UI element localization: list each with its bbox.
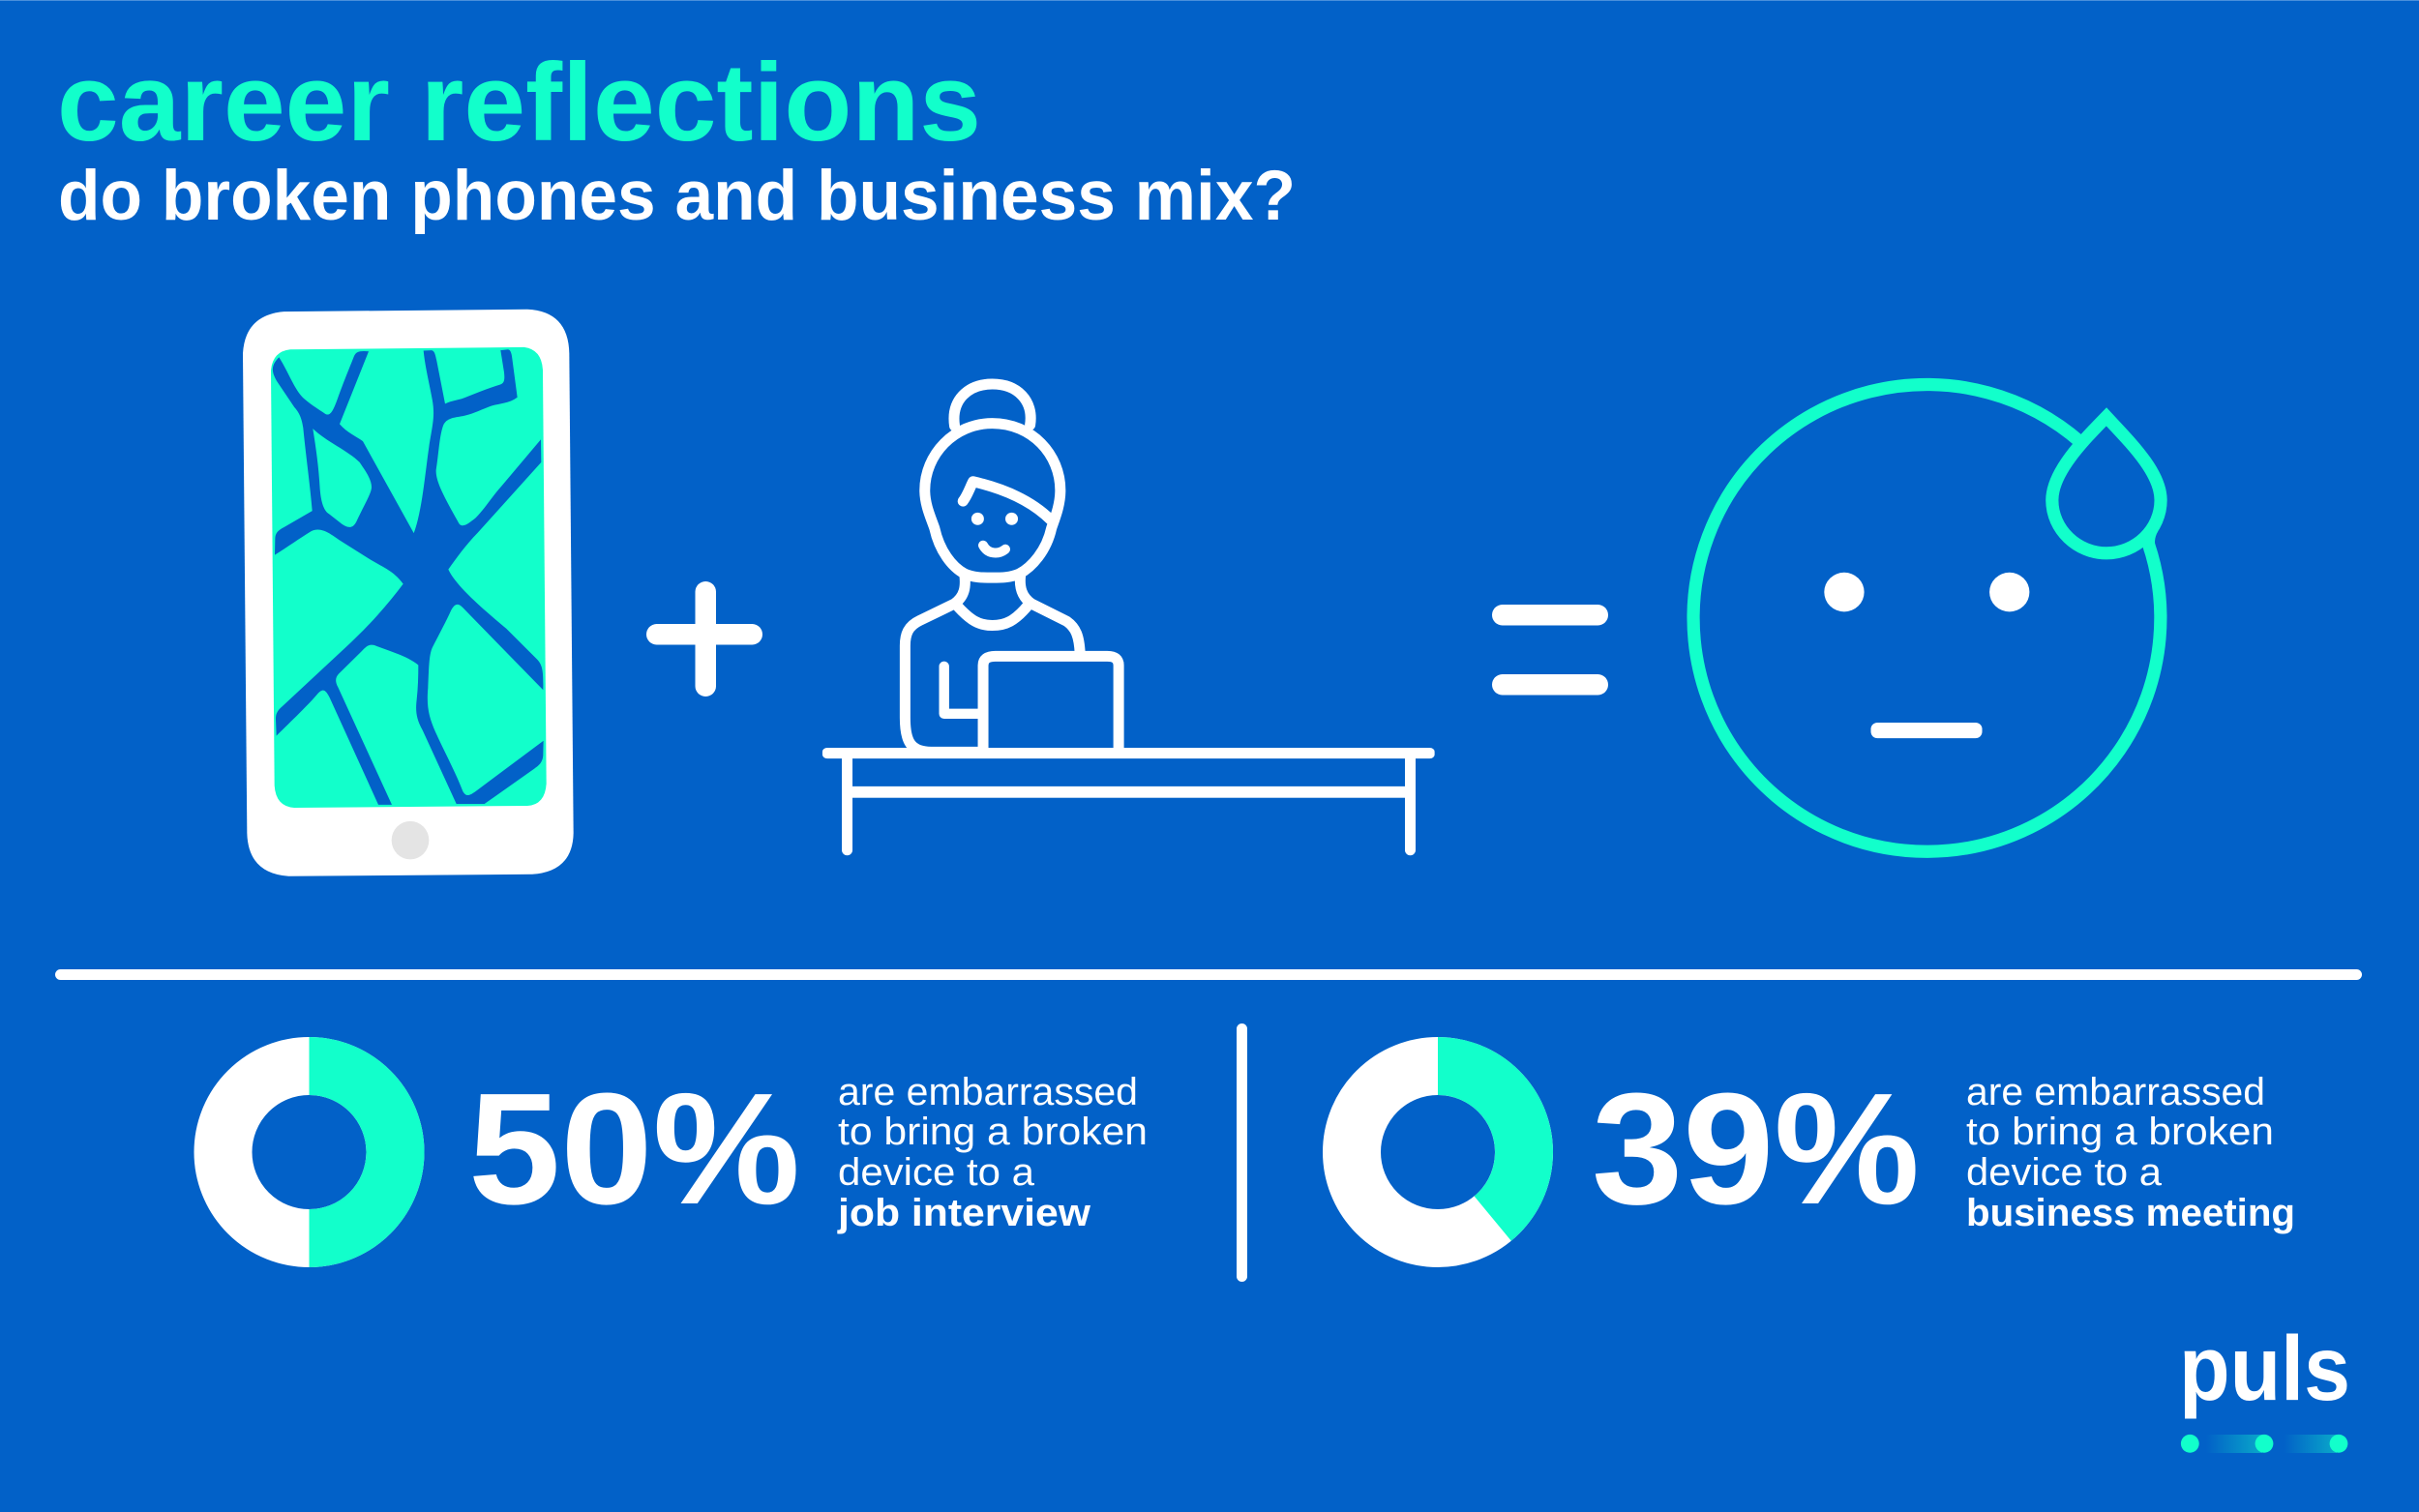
text block: business meeting: are embarrassed bbox=[1966, 1071, 2265, 1113]
vertical divider bbox=[1237, 1023, 1247, 1282]
text block: job interview bbox=[837, 1071, 1148, 1234]
donut chart: 50% bbox=[223, 1066, 395, 1238]
text block: job interview: device to a bbox=[838, 1151, 1035, 1194]
icon: cracked phone bbox=[243, 310, 574, 876]
text block: job interview: to bring a broken bbox=[838, 1111, 1148, 1153]
icon: sweating neutral face bbox=[1693, 384, 2161, 851]
text block: business meeting: business meeting bbox=[1966, 1192, 2295, 1234]
statistic: 50%: 50% bbox=[468, 1060, 800, 1237]
icon: equals sign bbox=[1492, 605, 1608, 695]
text block: business meeting: to bring a broken bbox=[1966, 1111, 2274, 1153]
horizontal divider bbox=[55, 969, 2362, 980]
logo: puls: puls bbox=[2179, 1318, 2350, 1420]
statistic: 39%: 39% bbox=[1592, 1060, 1920, 1237]
text block: job interview: job interview bbox=[837, 1192, 1091, 1234]
text block: business meeting bbox=[1966, 1071, 2295, 1234]
icon: plus sign bbox=[646, 581, 762, 697]
icon: woman working at laptop on desk bbox=[822, 384, 1435, 850]
donut chart: 39% bbox=[1352, 1066, 1524, 1238]
text block: job interview: are embarrassed bbox=[838, 1071, 1138, 1113]
subtitle: do broken phones and business mix? bbox=[58, 157, 1296, 235]
title: career reflections bbox=[57, 42, 981, 164]
text block: business meeting: device to a bbox=[1966, 1151, 2163, 1194]
